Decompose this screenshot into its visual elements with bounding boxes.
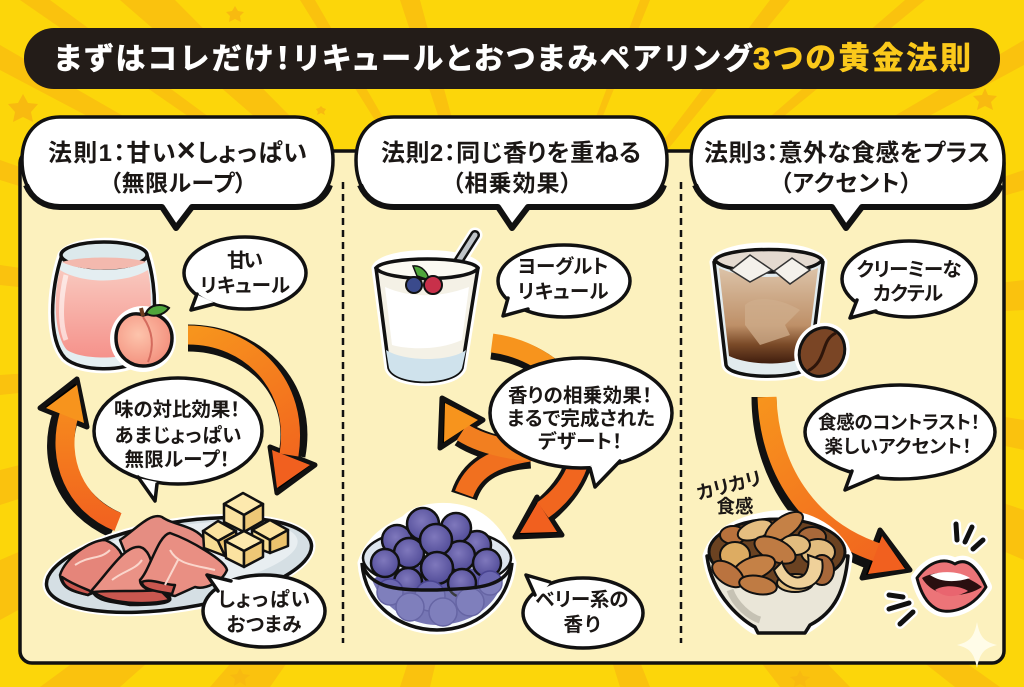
- callout: yogurt liqueur: [498, 245, 630, 317]
- callout: berry aroma: [523, 575, 643, 648]
- callout: aroma synergy: まるで完成された: [507, 407, 655, 430]
- column divider left: [342, 182, 344, 643]
- icon: bowl of mixed nuts: [707, 506, 848, 633]
- icon: open mouth with action lines: [889, 524, 986, 624]
- heading bubble: rule 2: 法則2：同じ香りを重ねる: [381, 140, 641, 167]
- icon: creamy coffee cocktail: [714, 247, 823, 376]
- callout: contrast effect: 味の対比効果！: [114, 399, 240, 421]
- arrow: cocktail and nuts to mouth: [764, 397, 910, 578]
- icon: pink liqueur glass: [53, 242, 155, 369]
- callout: contrast effect: [94, 378, 262, 501]
- heading bubble: rule 2: [356, 117, 667, 228]
- callout: sweet liqueur: リキュール: [200, 275, 290, 297]
- callout: yogurt liqueur: ヨーグルト: [518, 255, 608, 278]
- arrow: left arrow up to yogurt: [440, 398, 530, 496]
- callout: salty snack: おつまみ: [226, 614, 302, 636]
- label: crunchy texture: カリカリ: [694, 467, 763, 504]
- arrow: sweet to salty: [188, 335, 315, 493]
- heading bubble: rule 3: [691, 117, 1004, 228]
- label: crunchy texture: 食感: [716, 496, 754, 517]
- callout: texture contrast: [805, 385, 995, 490]
- icon: bowl of blueberries: [362, 507, 512, 630]
- icon: plate with ham and cheese: [35, 493, 323, 633]
- cheese cubes: [203, 493, 288, 567]
- callout: aroma synergy: デザート！: [538, 430, 622, 453]
- callout: contrast effect: あまじょっぱい: [114, 425, 242, 447]
- icon: peach: [110, 305, 176, 372]
- heading bubble: rule 2: （相乗効果）: [452, 170, 572, 196]
- panel: main cream card: [20, 151, 1004, 663]
- icon: yogurt glass with spoon: [376, 235, 478, 382]
- arrow: top arc behind bubble: [492, 343, 552, 372]
- callout: sweet liqueur: [184, 237, 306, 310]
- title bar: まずはコレだけ！リキュールとおつまみペアリング: [54, 43, 753, 76]
- callout: creamy cocktail: クリーミーな: [856, 259, 962, 281]
- callout: creamy cocktail: カクテル: [873, 283, 943, 305]
- arrow: salty to sweet: [40, 379, 118, 525]
- callout: salty snack: [203, 575, 325, 647]
- heading bubble: rule 3: 法則3：意外な食感をプラス: [704, 140, 990, 167]
- callout: yogurt liqueur: リキュール: [518, 281, 608, 303]
- heading bubble: rule 1: 法則1：甘い×しょっぱい: [48, 132, 307, 168]
- callout: berry aroma: 香り: [564, 614, 600, 636]
- ham slices: [60, 516, 227, 605]
- callout: sweet liqueur: 甘い: [227, 250, 263, 272]
- callout: texture contrast: 楽しいアクセント！: [824, 436, 972, 457]
- callout: salty snack: しょっぱい: [218, 589, 310, 611]
- title bar: 3つの黄金法則: [753, 41, 971, 76]
- callout: aroma synergy: [490, 358, 672, 487]
- heading bubble: rule 1: （無限ループ）: [110, 170, 246, 196]
- callout: creamy cocktail: [842, 241, 976, 318]
- icon: sparkle watermark: [957, 622, 997, 668]
- callout: contrast effect: 無限ループ！: [124, 449, 230, 471]
- callout: berry aroma: ベリー系の: [535, 589, 628, 611]
- callout: aroma synergy: 香りの相乗効果！: [508, 385, 652, 407]
- heading bubble: rule 1: [22, 117, 333, 228]
- column divider right: [680, 182, 682, 643]
- title bar: [24, 28, 1000, 89]
- heading bubble: rule 3: （アクセント）: [780, 170, 912, 196]
- icon: coffee bean: [784, 313, 860, 391]
- arrow: right arrow down to berries: [515, 465, 578, 537]
- callout: texture contrast: 食感のコントラスト！: [818, 412, 980, 433]
